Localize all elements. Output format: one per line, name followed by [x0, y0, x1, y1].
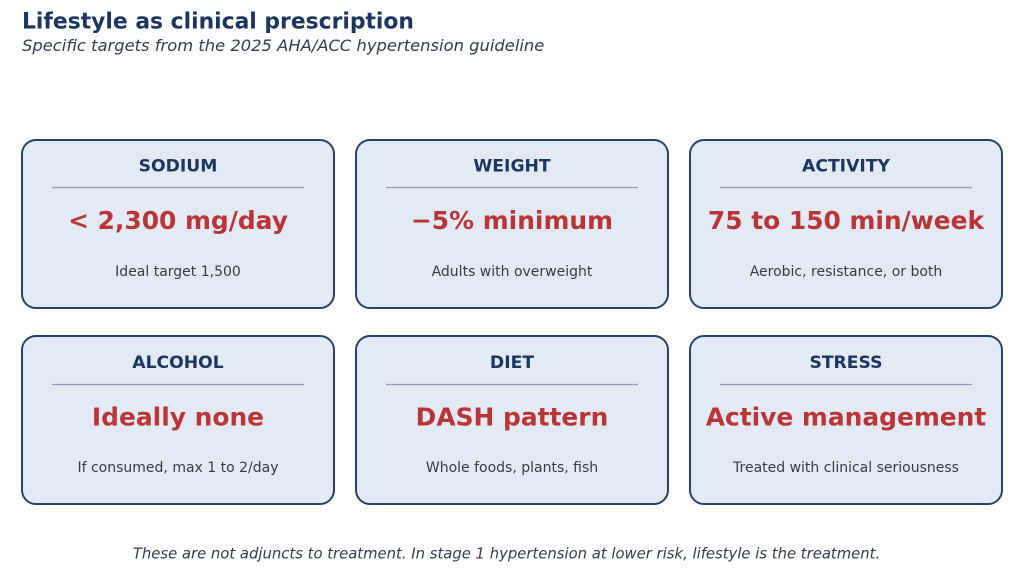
panel: stress: Treated with clinical seriousness — [732, 460, 959, 476]
panel: alcohol: If consumed, max 1 to 2/day — [77, 460, 279, 476]
panel: sodium: Ideal target 1,500 — [115, 264, 241, 280]
panel: alcohol: Ideally none — [92, 402, 264, 432]
panel: stress — [690, 336, 1002, 504]
footer note: These are not adjuncts to treatment. In stage 1 hypertension at lower risk, lifestyle is the treatment. — [133, 546, 880, 562]
panel: diet: Whole foods, plants, fish — [426, 460, 598, 476]
panel: diet — [356, 336, 668, 504]
panel: sodium — [22, 140, 334, 308]
panel: sodium: < 2,300 mg/day — [68, 206, 288, 235]
panel: diet: DASH pattern — [416, 402, 608, 432]
panel: activity: 75 to 150 min/week — [708, 206, 986, 235]
panel: weight: −5% minimum — [411, 206, 613, 235]
panel: stress: STRESS — [809, 353, 883, 373]
panel: weight: WEIGHT — [473, 156, 551, 176]
panel: alcohol — [22, 336, 334, 504]
panel: diet: DIET — [490, 353, 534, 373]
panel: sodium: SODIUM — [139, 156, 217, 176]
panel: activity — [690, 140, 1002, 308]
panel: weight — [356, 140, 668, 308]
subtitle: Specific targets from the 2025 AHA/ACC hypertension guideline — [22, 36, 544, 55]
panel: activity: Aerobic, resistance, or both — [750, 264, 942, 280]
panel: weight: Adults with overweight — [432, 264, 593, 280]
panel: alcohol: ALCOHOL — [132, 353, 224, 373]
panel: stress: Active management — [706, 402, 986, 432]
title: Lifestyle as clinical prescription — [22, 10, 414, 34]
panel: activity: ACTIVITY — [802, 156, 891, 176]
